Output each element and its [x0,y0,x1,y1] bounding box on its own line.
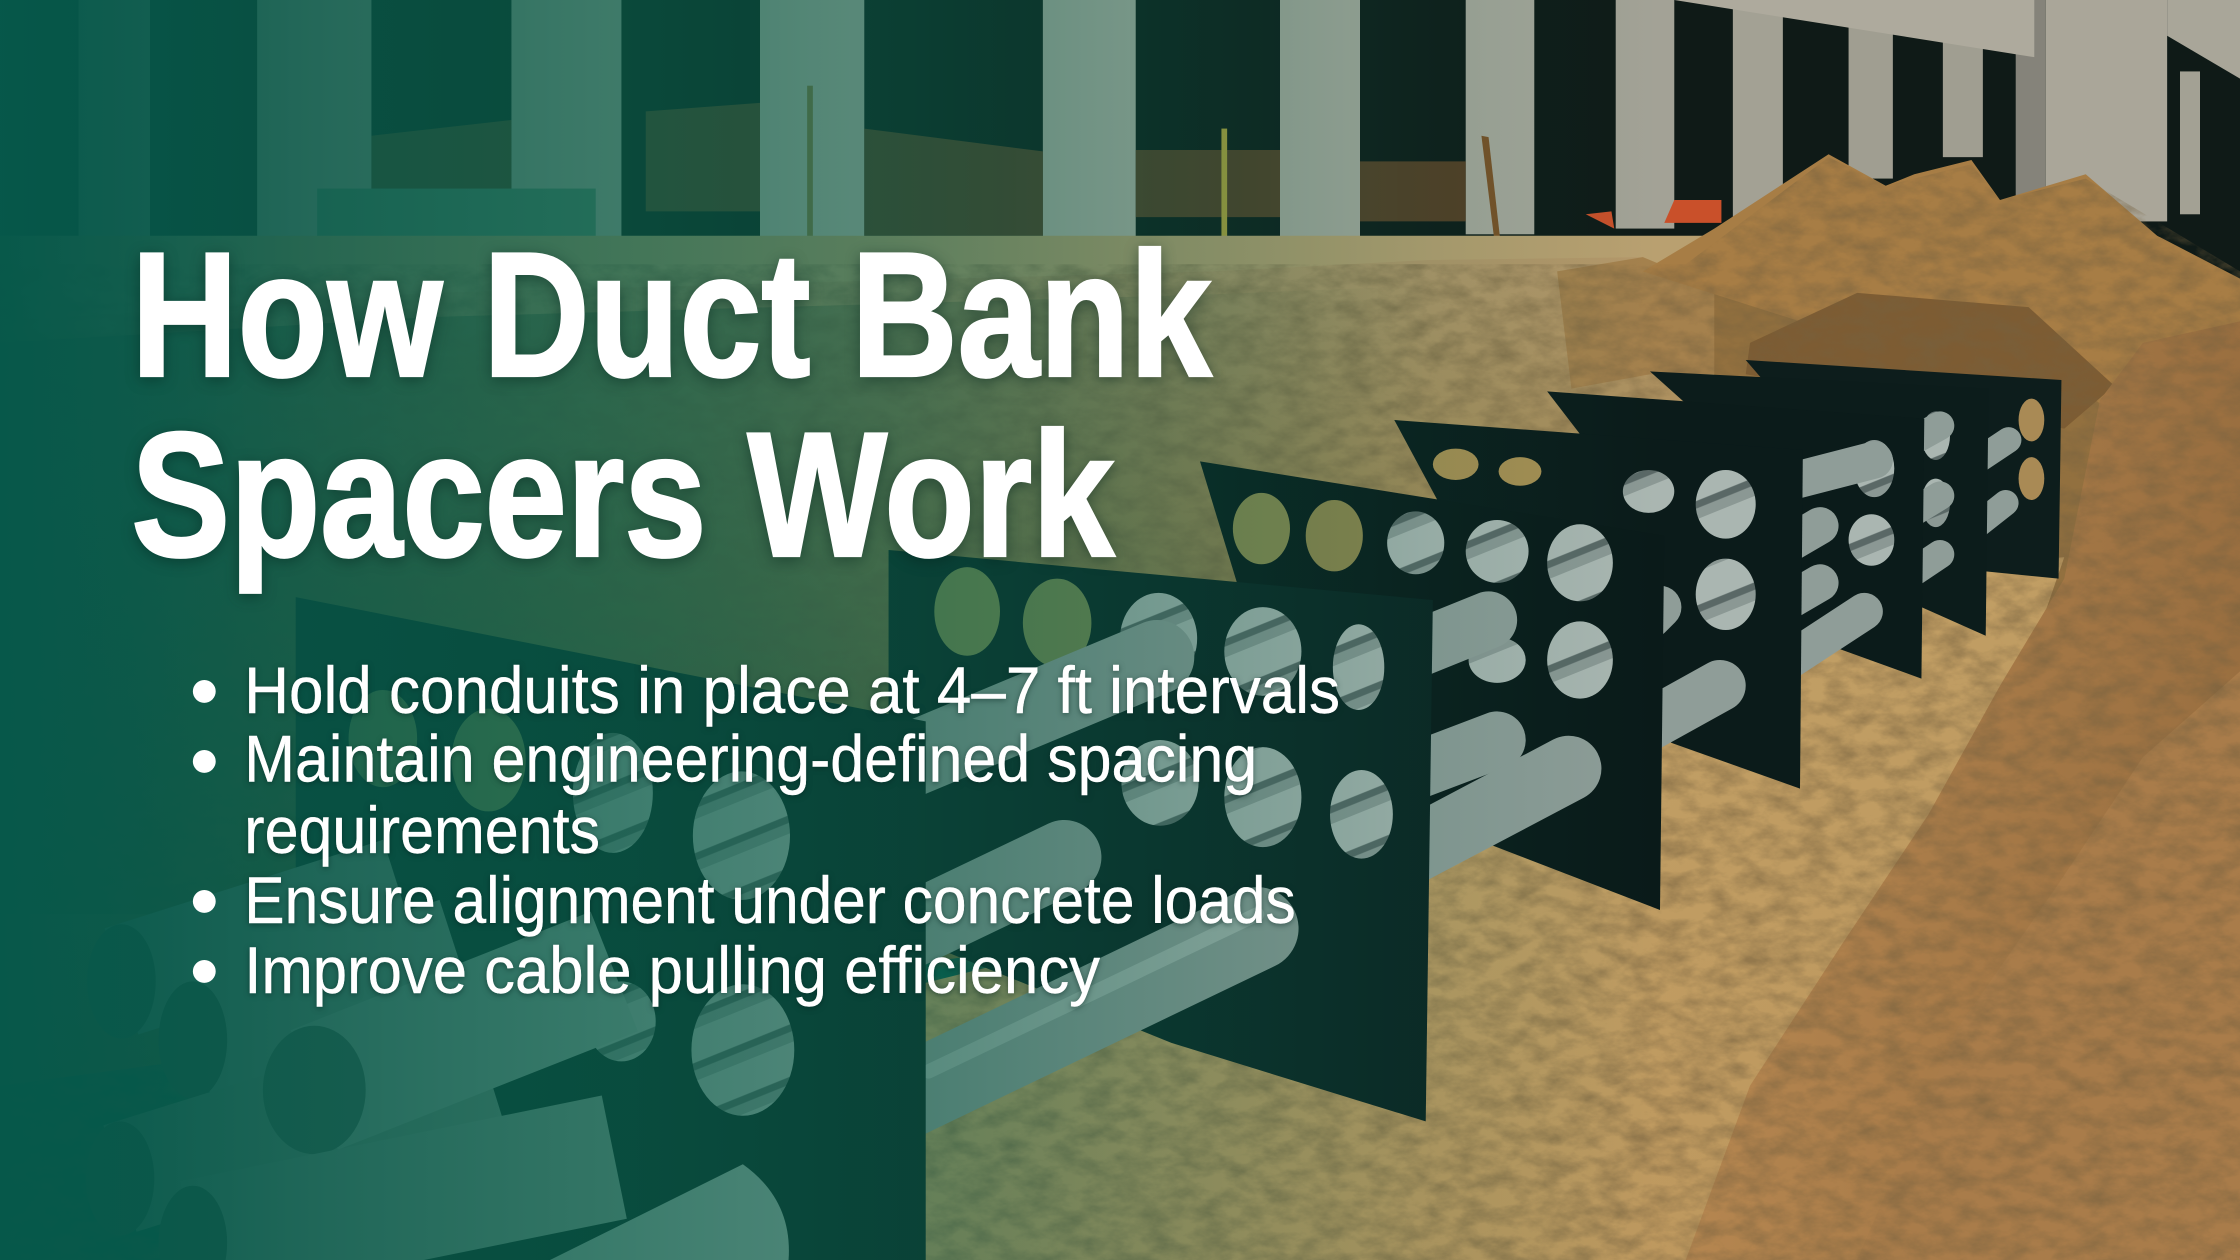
bullet: pulling: Improve cable pulling efficiency [244,934,1100,1007]
right spoil heap [1686,321,2240,1260]
bullet: spacing: Maintain engineering-defined spacing [244,722,1257,795]
spacer 5 [1547,391,1924,679]
conduits 1-2 [900,657,1257,1100]
soil texture [476,158,2240,1260]
conduits 3-4 [1643,607,1720,729]
bullet list [193,654,1340,1007]
bullet: spacing: requirements [244,794,600,867]
wall shading toward the left [0,286,1429,914]
spacer 2 [889,550,1433,1121]
title [131,216,1212,594]
spacer 6 [1650,371,1989,636]
far trench wall [0,257,1800,1086]
conduits 4-5 [1786,460,1874,663]
conduits 5-6 [1914,426,1940,571]
bullet: alignment: Ensure alignment under concrete loads [244,864,1296,937]
conduits 2-3 [1414,620,1569,850]
spacer 4 [1394,420,1803,789]
spacer 7 [1746,360,2061,579]
spoil heap behind trench [1643,154,2240,414]
bullet: spacing [193,722,1257,867]
near conduits with open ends [86,893,789,1260]
wall shoulder turning brown [1557,257,1800,389]
ground surface [0,236,1757,343]
trench end [1746,293,2114,429]
stacked material and site debris [317,86,1721,269]
bullet: intervals: Hold conduits in place at 4–7 ft intervals [244,654,1340,727]
earth backing behind the trench end [1714,286,2240,686]
conduits 6-7 [1979,440,2009,524]
spacer 3 [1200,461,1664,910]
building facade [0,0,2240,286]
spacers and conduits, far to near [86,360,2061,1260]
spacer 1 [296,597,926,1260]
heap shadow side [1857,671,2240,1260]
title: Spacers Work [131,396,1115,594]
trench floor [857,557,2064,1260]
safety fence [371,103,1466,236]
title: How Duct Bank [131,216,1212,414]
